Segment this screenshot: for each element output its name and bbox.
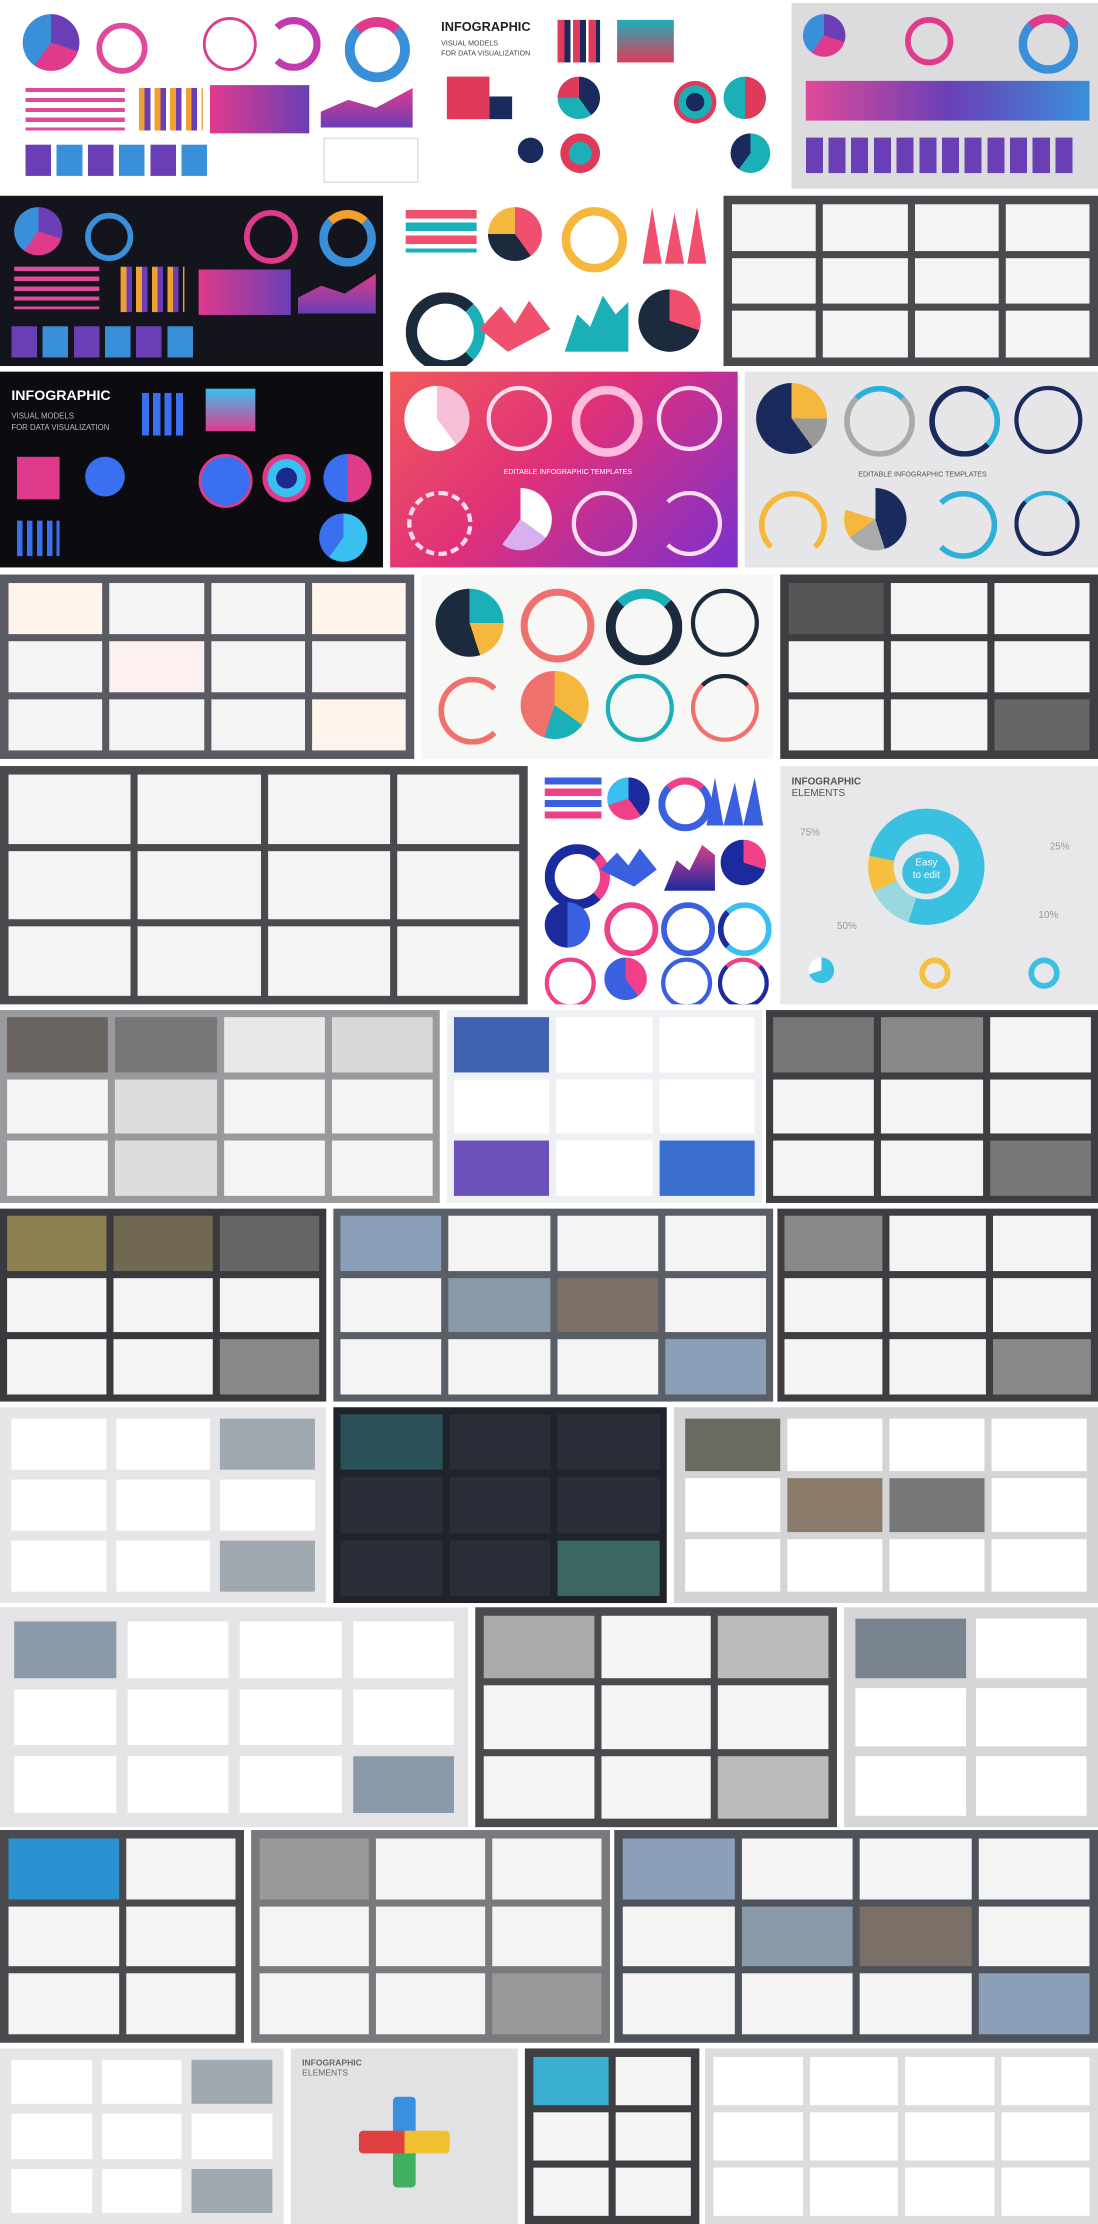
tile: blue light slides (0, 1607, 468, 1827)
tile: green slides (674, 1407, 1098, 1603)
tile: infographic elements easy to edit: to edit (913, 871, 940, 881)
tile: gray headline slides 2 (251, 1830, 610, 2043)
tile: blue city slides (333, 1209, 773, 1402)
tile: infographic visual models white: VISUAL MODELS (441, 40, 498, 48)
tile: headline yellow hexagon slides (766, 1010, 1098, 1203)
tile: dark infographic: VISUAL MODELS (11, 413, 74, 421)
tile: infographic elements easy to edit: 10% (1038, 911, 1058, 921)
tile: presentation template slides (0, 575, 414, 759)
tile: colorful stripe slides (0, 1407, 326, 1603)
tile: infographic elements easy to edit: INFOGRAPHIC (792, 777, 861, 787)
tile: infographic elements easy to edit: ELEMENTS (792, 789, 845, 799)
tile: infographic elements easy to edit: 25% (1050, 843, 1070, 853)
tile: infographic elements cross: INFOGRAPHIC (302, 2060, 362, 2068)
tile: dark frame slides (723, 196, 1098, 366)
tile: infographic elements easy to edit (780, 766, 1098, 1004)
tile: blue headline dark slides (0, 1830, 244, 2043)
tile: light gray editable templates: EDITABLE INFOGRAPHIC TEMPLATES (858, 471, 987, 479)
tile: yellow hexagon slides dark (0, 1209, 326, 1402)
tile: dark infographic (0, 372, 383, 567)
tile: pink gradient editable templates (390, 372, 738, 567)
tile: dark infographic: FOR DATA VISUALIZATION (11, 424, 109, 433)
tile: gray headline blue slides (475, 1607, 837, 1827)
tile: dark gray slides yellow (780, 575, 1098, 759)
tile: light gray editable templates (745, 372, 1098, 567)
tile: circle rings (421, 575, 773, 759)
tile: headline colorful dark slides (525, 2048, 699, 2224)
tile: colorful charts white (22, 14, 418, 183)
tile: presentation template light (844, 1607, 1098, 1827)
tile: infographic elements easy to edit: Easy (915, 858, 937, 868)
tile: infographic elements easy to edit: 75% (800, 828, 820, 838)
tile: infographic visual models white (433, 3, 780, 189)
tile: blue pink charts (536, 766, 773, 1004)
tile: blue city slides 2 (614, 1830, 1098, 2043)
tile: gray colorful charts (792, 3, 1098, 189)
tile: gray shape slides (0, 766, 528, 1004)
tile: dark infographic: INFOGRAPHIC (11, 389, 111, 404)
tile: infographic elements cross (291, 2048, 518, 2224)
tile: infographic visual models white: INFOGRAPHIC (441, 20, 531, 34)
tile: infographic elements easy to edit: 50% (837, 922, 857, 932)
tile: headline gray slides (777, 1209, 1098, 1402)
tile: red blue presentation slides (705, 2048, 1098, 2224)
tile: dark navy headline slides (333, 1407, 667, 1603)
tile: infographic visual models white: FOR DATA VISUALIZATION (441, 50, 530, 58)
tile: dark charts (0, 196, 383, 366)
tile: blue presentation template (447, 1010, 762, 1203)
tile: colorful stripe slides 2 (0, 2048, 284, 2224)
tile: bright shapes white (406, 207, 706, 366)
tile: infographic elements cross: ELEMENTS (302, 2070, 348, 2078)
tile: pink gradient editable templates: EDITABLE INFOGRAPHIC TEMPLATES (504, 468, 632, 477)
tile: headline 2017 gray slides (0, 1010, 440, 1203)
